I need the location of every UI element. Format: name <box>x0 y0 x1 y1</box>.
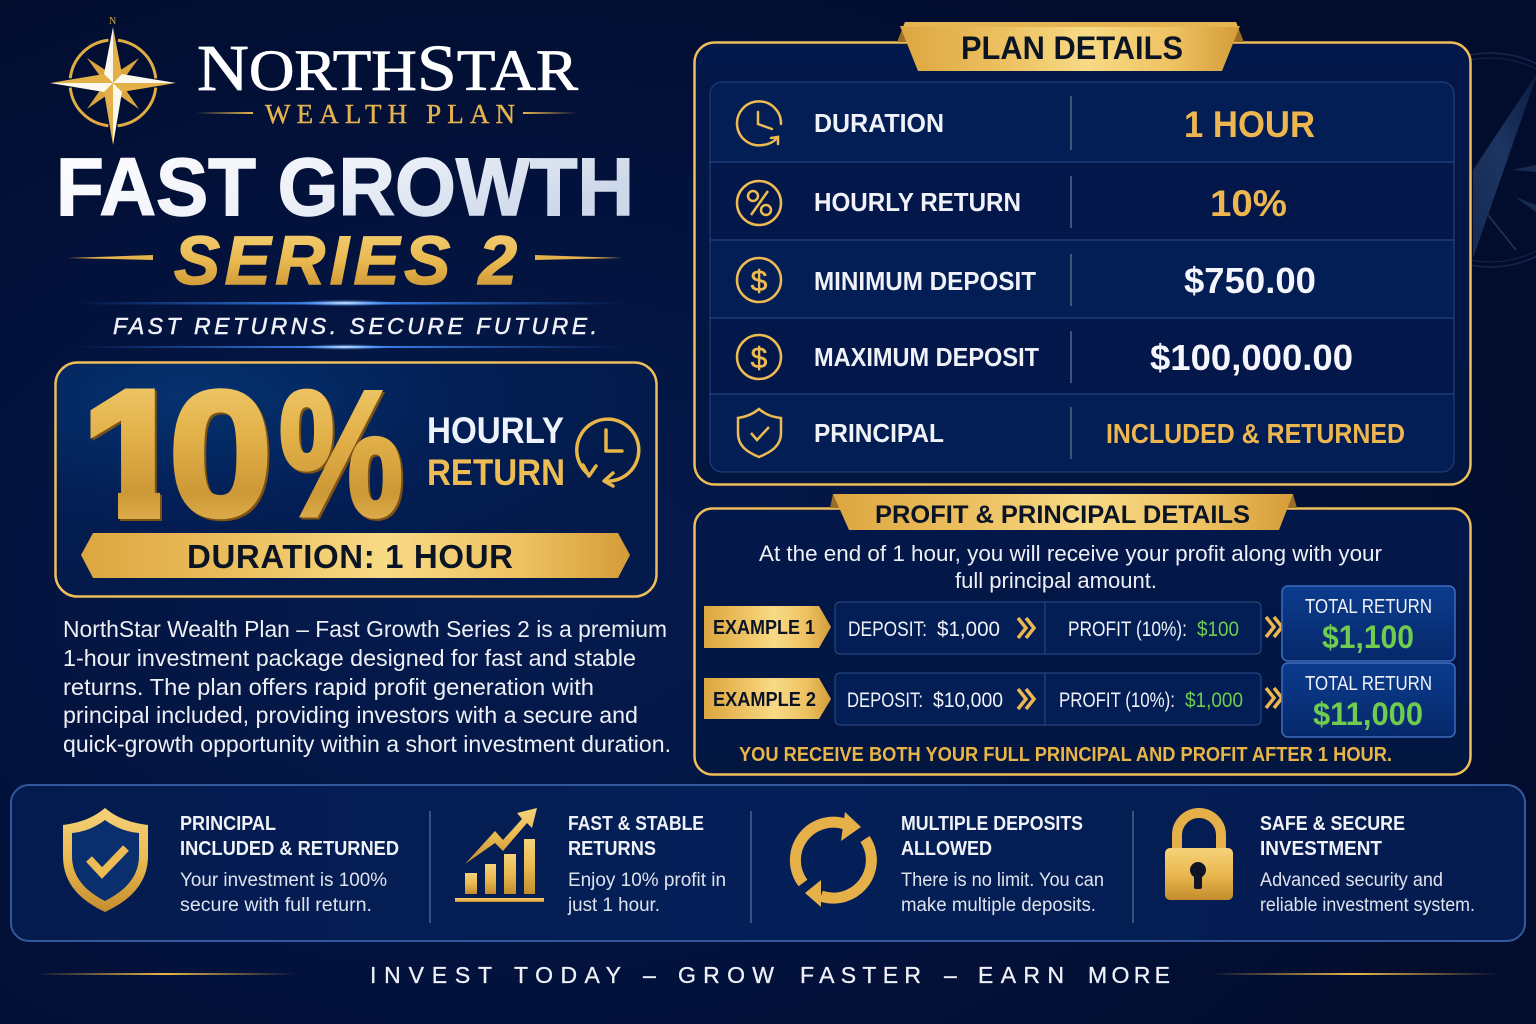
decorative compass watermark <box>1383 53 1536 267</box>
heading ribbon: profit and principal: PROFIT & PRINCIPAL DETAILS <box>875 501 1250 529</box>
feature: multiple deposits: There is no limit. You can <box>901 870 1104 891</box>
row: minimum deposit <box>737 258 1316 302</box>
row: minimum deposit: $ <box>751 265 768 298</box>
feature: fast returns: Enjoy 10% profit in <box>568 870 726 891</box>
row: principal: INCLUDED & RETURNED <box>1106 418 1405 449</box>
footer tagline: – <box>944 962 957 988</box>
feature: safe and secure: reliable investment system. <box>1260 895 1475 916</box>
glow line lower <box>75 344 625 350</box>
icon: rising bar chart <box>455 808 544 902</box>
example 1: $100 <box>1197 618 1239 641</box>
icon: padlock <box>1165 813 1233 900</box>
hourly return label <box>427 410 565 493</box>
total return 1 <box>1282 586 1455 661</box>
total return 2: TOTAL RETURN <box>1305 673 1432 695</box>
feature: safe and secure: INVESTMENT <box>1260 838 1382 860</box>
row: maximum deposit: $100,000.00 <box>1150 337 1353 378</box>
row: maximum deposit: $ <box>751 342 768 375</box>
feature: multiple deposits <box>795 812 1104 916</box>
big 10%: 1 <box>82 354 185 553</box>
footer tagline <box>35 962 1500 988</box>
tag: example 2: EXAMPLE 2 <box>713 689 816 711</box>
row: maximum deposit <box>737 335 1353 379</box>
panel: hero return <box>56 354 656 596</box>
panel: profit and principal details <box>694 494 1470 774</box>
duration ribbon <box>81 533 630 578</box>
footer tagline: INVEST <box>370 962 492 988</box>
footer tagline: FASTER <box>800 962 921 988</box>
total return 1: TOTAL RETURN <box>1305 596 1432 618</box>
heading ribbon: profit and principal <box>830 494 1297 530</box>
feature: fast returns: just 1 hour. <box>567 895 660 916</box>
row: hourly return: 10% <box>1210 183 1287 224</box>
total return 1: $1,100 <box>1322 619 1414 655</box>
heading ribbon: plan details <box>897 22 1244 71</box>
example 1: PROFIT (10%): <box>1068 618 1187 641</box>
feature: safe and secure <box>1165 813 1475 916</box>
example 1: $1,000 <box>937 618 1000 641</box>
total return 2 <box>1282 663 1455 737</box>
hourly return label: RETURN <box>427 452 565 493</box>
row: hourly return <box>737 181 1287 225</box>
description text: quick-growth opportunity within a short investment duration. <box>63 731 671 757</box>
subtitle: series 2: SERIES 2 <box>174 222 517 299</box>
hourly return label: HOURLY <box>427 410 564 451</box>
tag: example 2 <box>704 678 831 719</box>
tagline: FAST RETURNS. SECURE FUTURE. <box>113 313 597 339</box>
description text: principal included, providing investors with a secure and <box>63 702 638 728</box>
feature: fast returns: RETURNS <box>568 838 656 860</box>
feature: multiple deposits: MULTIPLE DEPOSITS <box>901 813 1083 835</box>
logo wordmark: NORTHSTAR <box>197 32 578 105</box>
intro text: At the end of 1 hour, you will receive your profit along with your <box>759 541 1382 566</box>
big 10%: % <box>279 354 403 553</box>
feature: fast returns: FAST & STABLE <box>568 813 704 835</box>
panel: features strip <box>11 785 1525 941</box>
example 1: DEPOSIT: <box>848 618 927 641</box>
footer tagline: GROW <box>678 962 774 988</box>
subtitle: series 2 <box>68 222 622 299</box>
feature: principal: PRINCIPAL <box>180 813 276 835</box>
tag: example 1: EXAMPLE 1 <box>713 617 815 639</box>
big 10%: 0 <box>168 354 272 553</box>
footer tagline: MORE <box>1088 962 1170 988</box>
intro text <box>759 541 1382 593</box>
intro text: full principal amount. <box>955 568 1157 593</box>
row: duration: 1 HOUR <box>1184 104 1315 145</box>
example 2: $10,000 <box>933 689 1003 712</box>
big 10%: 0 <box>170 356 274 555</box>
example 2: $1,000 <box>1185 689 1243 712</box>
feature: safe and secure: SAFE & SECURE <box>1260 813 1405 835</box>
row: principal: PRINCIPAL <box>814 418 944 448</box>
heading ribbon: plan details: PLAN DETAILS <box>961 30 1183 66</box>
icon: clock <box>577 419 639 486</box>
icon: refresh arrows <box>795 812 871 907</box>
duration ribbon: DURATION: 1 HOUR <box>187 538 513 575</box>
big 10%: % <box>281 356 405 555</box>
example 2: DEPOSIT: <box>847 689 923 712</box>
feature: fast returns <box>455 808 726 916</box>
feature: multiple deposits: ALLOWED <box>901 838 992 860</box>
tag: example 1 <box>704 606 831 648</box>
title: FAST GROWTH <box>56 142 634 233</box>
example 2 <box>704 663 1455 737</box>
example 1 <box>704 586 1455 661</box>
row: hourly return: HOURLY RETURN <box>814 187 1021 217</box>
glow line <box>75 300 625 306</box>
row: duration: DURATION <box>814 108 944 138</box>
big 10% <box>90 388 404 522</box>
feature: principal: secure with full return. <box>180 895 372 916</box>
total return 2: $11,000 <box>1313 696 1423 732</box>
description text: 1-hour investment package designed for fast and stable <box>63 645 636 671</box>
feature: principal <box>63 808 399 916</box>
note: YOU RECEIVE BOTH YOUR FULL PRINCIPAL AND PROFIT AFTER 1 HOUR. <box>739 744 1392 766</box>
row: minimum deposit: MINIMUM DEPOSIT <box>814 266 1036 296</box>
feature: safe and secure: Advanced security and <box>1260 870 1443 891</box>
description text: NorthStar Wealth Plan – Fast Growth Series 2 is a premium <box>63 616 667 642</box>
feature: principal: INCLUDED & RETURNED <box>180 838 399 860</box>
logo subtitle: WEALTH PLAN <box>265 99 515 129</box>
feature: principal: Your investment is 100% <box>180 870 387 891</box>
panel: plan details <box>694 22 1470 484</box>
icon: shield <box>63 808 148 912</box>
footer tagline: – <box>643 962 656 988</box>
feature: multiple deposits: make multiple deposits. <box>901 895 1096 916</box>
icon: compass star <box>50 16 176 145</box>
row: maximum deposit: MAXIMUM DEPOSIT <box>814 342 1039 372</box>
footer tagline: EARN <box>978 962 1064 988</box>
row: principal <box>738 409 1405 457</box>
example 2: PROFIT (10%): <box>1059 689 1175 712</box>
table <box>710 82 1454 472</box>
description text: returns. The plan offers rapid profit generation with <box>63 674 594 700</box>
big 10%: 1 <box>84 356 187 555</box>
icon: compass star: N <box>109 16 116 27</box>
description text <box>63 616 671 757</box>
footer tagline: TODAY <box>514 962 621 988</box>
row: duration <box>737 101 1315 145</box>
row: minimum deposit: $750.00 <box>1184 260 1316 301</box>
logo <box>50 16 578 145</box>
